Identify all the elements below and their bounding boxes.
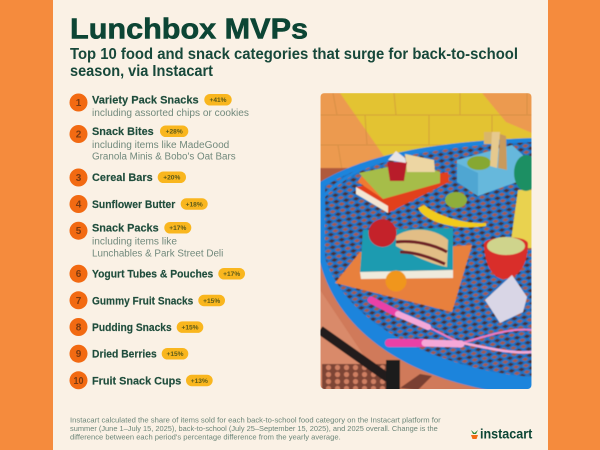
item 10: Fruit Snack Cups: +13% <box>191 378 208 385</box>
item 9: Dried Berries <box>70 345 188 363</box>
footnote <box>70 416 441 441</box>
item 4: Sunflower Butter: Sunflower Butter <box>92 199 176 211</box>
teal book with white pages <box>360 228 453 279</box>
item 1: Variety Pack Snacks: +41% <box>209 97 227 104</box>
item 1: Variety Pack Snacks: Variety Pack Snacks <box>92 94 199 106</box>
grapes <box>445 192 467 208</box>
sandwich <box>396 230 448 267</box>
item 6: Yogurt Tubes & Pouches: Yogurt Tubes & Pouches <box>92 269 213 281</box>
title: Lunchbox MVPs <box>70 14 308 46</box>
item 7: Gummy Fruit Snacks: +15% <box>203 298 220 305</box>
item 6: Yogurt Tubes & Pouches: 6 <box>76 269 82 280</box>
item 4: Sunflower Butter: +18% <box>186 201 203 208</box>
subtitle: season, via Instacart <box>70 63 213 80</box>
item 6: Yogurt Tubes & Pouches: +17% <box>223 271 240 278</box>
item 2: Snack Bites: 2 <box>76 130 82 140</box>
footnote: summer (June 1–July 15, 2025), back-to-school (July 25–September 15, 2025), and 2025 overall. Change is the <box>70 424 438 433</box>
item 3: Cereal Bars: 3 <box>76 173 82 184</box>
item 3: Cereal Bars: +20% <box>163 175 180 182</box>
item 5: Snack Packs: Snack Packs <box>92 223 159 235</box>
item 8: Pudding Snacks: 8 <box>76 322 82 334</box>
item 9: Dried Berries: Dried Berries <box>92 349 157 361</box>
item 5: Snack Packs: +17% <box>169 225 186 232</box>
red book and green book <box>356 162 449 213</box>
footnote: difference between each period's percentage difference from the yearly average. <box>70 432 341 441</box>
item 7: Gummy Fruit Snacks: 7 <box>76 296 82 307</box>
item 6: Yogurt Tubes & Pouches <box>70 265 245 283</box>
item 1: Variety Pack Snacks <box>70 94 249 119</box>
item 4: Sunflower Butter <box>70 195 208 213</box>
photo: lunch items on a blue mesh table <box>320 93 538 395</box>
footnote: Instacart calculated the share of items sold for each back-to-school food category on the Instacart platform for <box>70 416 441 425</box>
jam cup and sandwich <box>387 151 435 181</box>
item 1: Variety Pack Snacks: 1 <box>76 98 82 109</box>
item 3: Cereal Bars: Cereal Bars <box>92 172 153 184</box>
item 5: Snack Packs: Lunchables & Park Street Deli <box>92 248 223 259</box>
bottle <box>510 154 532 249</box>
item 2: Snack Bites: +28% <box>166 129 183 136</box>
blue sponge box with grapes and sandwich <box>457 132 525 196</box>
item 10: Fruit Snack Cups: Fruit Snack Cups <box>92 375 181 387</box>
item 2: Snack Bites: Snack Bites <box>92 126 154 138</box>
item 5: Snack Packs <box>70 222 223 259</box>
orange book <box>335 245 472 312</box>
item 5: Snack Packs: 5 <box>76 226 82 237</box>
item 3: Cereal Bars <box>70 168 186 186</box>
red bowl with apple slices <box>484 237 528 279</box>
subtitle <box>70 46 518 80</box>
item 2: Snack Bites: including items like MadeGood <box>92 140 229 151</box>
banana <box>418 205 486 227</box>
item 7: Gummy Fruit Snacks <box>70 291 225 309</box>
item 8: Pudding Snacks: Pudding Snacks <box>92 322 172 334</box>
paper fortune teller <box>485 275 527 323</box>
jump rope <box>371 300 532 352</box>
subtitle: Top 10 food and snack categories that surge for back-to-school <box>70 46 518 63</box>
logo: instacart: instacart <box>480 427 533 442</box>
item 7: Gummy Fruit Snacks: Gummy Fruit Snacks <box>92 295 193 307</box>
orange fruit <box>386 270 406 292</box>
item 10: Fruit Snack Cups: 10 <box>74 376 84 387</box>
item 8: Pudding Snacks <box>70 318 203 336</box>
item 2: Snack Bites <box>70 125 236 162</box>
item 8: Pudding Snacks: +15% <box>181 325 199 332</box>
item 10: Fruit Snack Cups <box>70 371 213 389</box>
item 2: Snack Bites: Granola Minis & Bobo's Oat Bars <box>92 152 236 162</box>
item 4: Sunflower Butter: 4 <box>76 200 82 210</box>
item 9: Dried Berries: 9 <box>76 349 82 360</box>
item 9: Dried Berries: +15% <box>166 351 184 358</box>
apple <box>368 219 396 247</box>
item 5: Snack Packs: including items like <box>92 237 177 248</box>
item 1: Variety Pack Snacks: including assorted chips or cookies <box>92 108 249 119</box>
ranked list <box>70 94 249 389</box>
